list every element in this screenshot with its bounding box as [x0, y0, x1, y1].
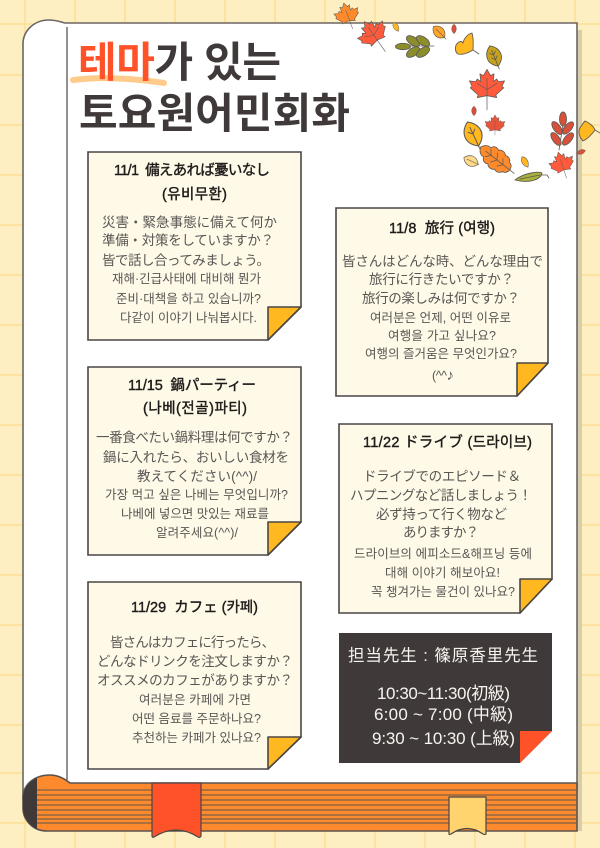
leaf: olive	[483, 43, 506, 72]
leaf: red maple	[352, 13, 398, 60]
note: 11/1: 皆で話し合ってみましょう。	[102, 253, 270, 268]
panel: teacher and times: 6:00 ~ 7:00 (中級)	[374, 705, 513, 724]
note: 11/29	[88, 582, 301, 769]
note: 11/1: 재해·긴급사태에 대비해 뭔가	[112, 272, 261, 286]
note: 11/22: ハプニングなど話しましょう！	[350, 488, 532, 503]
note: 11/15: 나베에 넣으면 맛있는 재료를	[121, 507, 269, 521]
leaf: long green	[515, 172, 549, 181]
leaf: small yellow seed	[519, 155, 531, 169]
note: 11/1: 準備・対策をしていますか？	[102, 232, 274, 248]
leaf: small star maple	[485, 115, 505, 135]
leaf: small red seed	[452, 24, 456, 34]
note: 11/1: 다같이 이야기 나눠봅시다.	[120, 311, 257, 325]
bookmark: yellow	[449, 797, 486, 834]
panel: teacher and times: 9:30 ~ 10:30 (上級)	[372, 729, 515, 748]
note: 11/8: 11/8 旅行 (여행)	[389, 220, 495, 237]
leaf: small orange	[430, 23, 450, 43]
leaf: orange oak	[474, 139, 521, 182]
title line 1: 테마가 있는	[78, 39, 281, 86]
note: 11/1: 災害・緊急事態に備えて何か	[102, 215, 278, 230]
note: 11/22: ありますか？	[403, 525, 479, 540]
note: 11/15: 알려주세요(^^)/	[156, 526, 239, 540]
autumn leaves	[332, 0, 600, 182]
note: 11/29: 11/29 カフェ (카페)	[131, 599, 258, 616]
leaf: pale	[462, 153, 481, 169]
leaf: green fern	[396, 33, 434, 60]
note: 11/15: 가장 먹고 싶은 나베는 무엇입니까?	[105, 488, 288, 502]
leaf: ginkgo right	[579, 121, 600, 141]
note: 11/8: 여러분은 언제, 어떤 이유로	[370, 311, 511, 325]
note: 11/8: 여행을 가고 싶나요?	[388, 328, 496, 343]
note: 11/15: 鍋に入れたら、おいしい食材を	[103, 450, 289, 465]
leaf: yellow	[460, 118, 487, 152]
note: 11/22: 꼭 챙겨가는 물건이 있나요?	[371, 584, 515, 599]
note: 11/22: 11/22 ドライブ (드라이브)	[363, 433, 532, 451]
note: 11/29: 어떤 음료를 주문하나요?	[132, 712, 261, 726]
note: 11/1: (유비무환)	[162, 186, 227, 203]
leaf: red star maple lower	[546, 148, 578, 182]
note: 11/8: 旅行に行きたいですか？	[369, 272, 514, 287]
title line 2: 토요원어민회화	[79, 90, 350, 137]
note: 11/29: 皆さんはカフェに行ったら、	[110, 635, 275, 650]
title	[73, 39, 350, 137]
leaf: ginkgo	[455, 33, 479, 54]
panel: teacher and times	[339, 633, 552, 763]
leaf: small red seed 2	[472, 106, 476, 116]
note: 11/15: (나베(전골)파티)	[143, 400, 247, 417]
note: 11/8	[336, 208, 548, 396]
note: 11/22: 必ず持って行く物など	[376, 507, 508, 522]
note: 11/22	[339, 424, 552, 613]
note: 11/29: オススメのカフェがありますか？	[97, 673, 293, 688]
note: 11/22: ドライブでのエピソード＆	[363, 468, 521, 484]
leaf: small red right	[576, 148, 586, 156]
note: 11/15: 11/15 鍋パーティー	[128, 377, 256, 394]
panel: teacher and times: 10:30~11:30(初級)	[377, 684, 510, 703]
note: 11/8: 旅行の楽しみは何ですか？	[362, 291, 520, 306]
title highlight stroke	[73, 78, 164, 83]
note: 11/1	[88, 152, 301, 340]
leaf: small seed	[391, 21, 401, 33]
note: 11/29: どんなドリンクを注文しますか？	[97, 654, 293, 669]
leaf: large red maple	[469, 69, 505, 110]
note: 11/1: 11/1 備えあれば憂いなし	[114, 162, 270, 179]
note: 11/15	[88, 367, 301, 555]
note: 11/15: 一番食べたい鍋料理は何ですか？	[96, 430, 293, 445]
leaf: orange maple	[332, 0, 363, 33]
note: 11/8: 여행의 즐거움은 무엇인가요?	[365, 346, 517, 361]
book page block bottom	[23, 775, 577, 831]
bookmark: red	[152, 783, 201, 837]
panel: teacher and times: 担当先生 : 篠原香里先生	[348, 646, 538, 665]
note: 11/8: (^^♪	[432, 367, 454, 384]
note: 11/1: 준비·대책을 하고 있습니까?	[116, 291, 261, 306]
note: 11/29: 추천하는 카페가 있나요?	[132, 730, 261, 745]
note: 11/22: 드라이브의 에피소드&해프닝 등에	[354, 547, 532, 561]
note: 11/8: 皆さんはどんな時、どんな理由で	[342, 254, 543, 269]
note: 11/29: 여러분은 카페에 가면	[139, 693, 251, 707]
note: 11/22: 대해 이야기 해보아요!	[385, 566, 500, 580]
leaf: red fern	[549, 112, 576, 150]
note: 11/15: 教えてください(^^)/	[137, 469, 257, 484]
